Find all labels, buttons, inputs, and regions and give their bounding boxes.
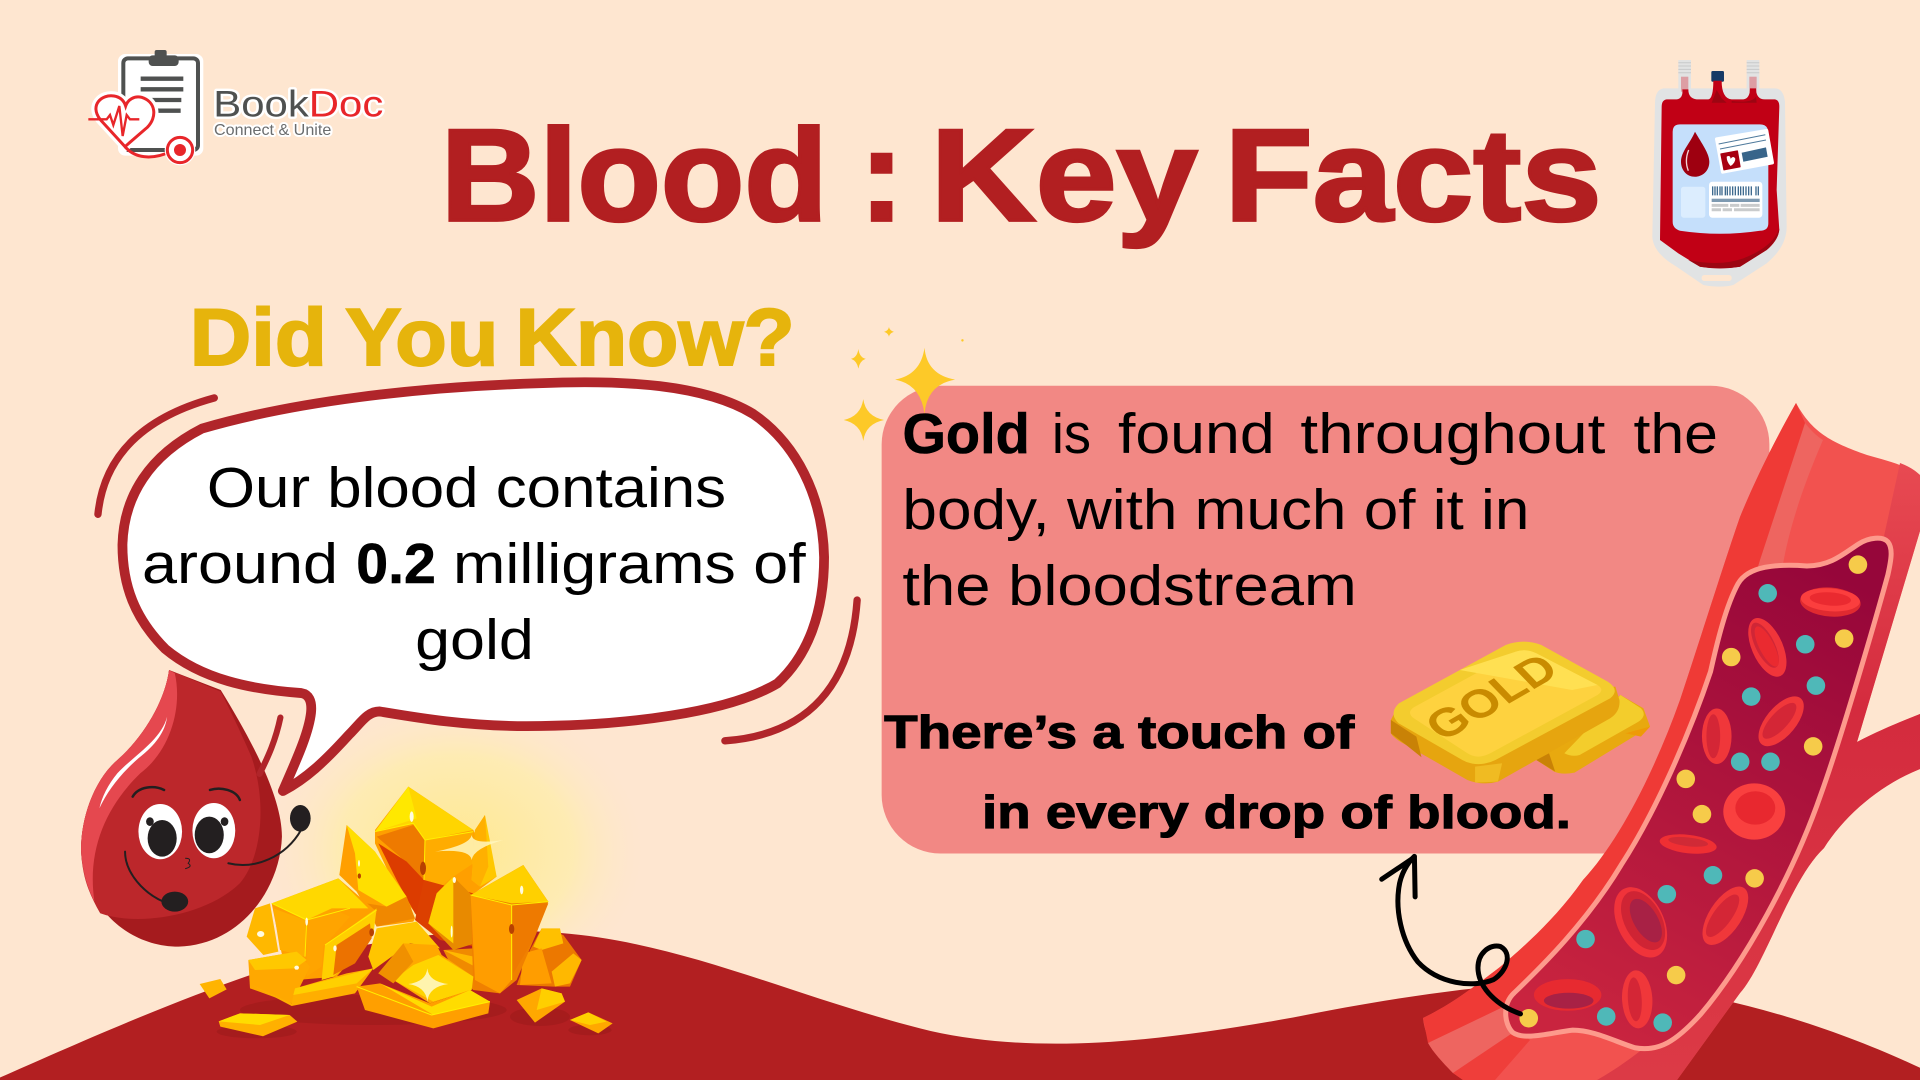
icon: gold bars: [1391, 642, 1650, 783]
character: blood drop: [81, 670, 311, 947]
arrow: vessel to gold text: [1382, 856, 1520, 1014]
text: touch of gold line two: in every drop of blood.: [982, 786, 1571, 838]
small gold nuggets: [200, 979, 613, 1036]
teal cells: [1576, 584, 1825, 1032]
red wave ground: [0, 931, 1920, 1080]
gold glow: [260, 692, 651, 1010]
title: Key: [931, 101, 1198, 248]
center front crystals: [357, 922, 490, 1028]
text: gold is found throughout the body: body, with much of it in: [902, 478, 1529, 541]
icon: blood bag: [1652, 60, 1787, 287]
title: [441, 101, 1602, 248]
text: GOLD stamp: GOLD: [1416, 646, 1568, 749]
wall outer red band: [1423, 403, 1805, 1043]
text: gold in blood fact: [142, 456, 806, 671]
text: gold in blood fact: 0.2: [356, 532, 436, 595]
wall lower red band: [1453, 1030, 1530, 1080]
face lines: [125, 787, 301, 902]
panel background: [882, 386, 1769, 853]
icon: heart with stethoscope: [88, 96, 195, 165]
bubble accent top left: [98, 398, 214, 514]
heading: Did You Know?: [190, 293, 795, 383]
text: gold in blood fact: Our blood contains: [207, 456, 726, 519]
text: gold is found throughout the body: found: [1118, 402, 1275, 465]
bubble outline: [122, 382, 824, 791]
logo tagline: Connect & Unite: [214, 122, 331, 139]
title: Facts: [1224, 101, 1602, 248]
middle crystals: [415, 865, 582, 993]
text: gold in blood fact: around: [142, 532, 338, 595]
yellow platelets: [1519, 555, 1867, 1028]
heading: Did You Know?: Know?: [516, 293, 795, 383]
bubble accent tail: [260, 718, 280, 774]
text: touch of gold line one: There’s a touch of: [884, 706, 1355, 758]
text: gold in blood fact: gold: [415, 608, 534, 671]
vessel lumen: [1506, 538, 1891, 1049]
wall base silhouette: [1423, 403, 1920, 1080]
text: gold in blood fact: milligrams of: [453, 532, 806, 595]
text: gold is found throughout the body: the bloodstream: [902, 554, 1357, 617]
illustration: blood vessel contents: [1382, 538, 1891, 1049]
heading: Did You Know?: You: [345, 293, 498, 383]
icon: sparkles: [844, 327, 964, 441]
logo wordmark: BookDoc: [213, 83, 383, 125]
red blood cells: [1534, 586, 1861, 1030]
ground shadows: [217, 995, 612, 1038]
bubble accent bottom right: [725, 600, 857, 741]
left spire crystal: [339, 825, 415, 927]
left crystals: [247, 878, 377, 1006]
wall lower light band: [1428, 1007, 1517, 1073]
title: :: [860, 101, 904, 248]
text: gold is found throughout the body: is: [1052, 402, 1091, 465]
illustration: gold crystals: [200, 787, 613, 1038]
illustration: blood vessel wall: [1423, 403, 1920, 1080]
eyes: [138, 803, 235, 859]
crystal edge highlights: [272, 823, 548, 1015]
wall right shaded band: [1597, 463, 1920, 1080]
wall upper light band: [1743, 423, 1823, 585]
text: gold is found throughout the body: Gold: [902, 402, 1030, 465]
crystal glints and spots: [257, 811, 523, 1002]
title: Blood: [441, 101, 828, 248]
heading: Did You Know?: Did: [190, 293, 327, 383]
text: gold is found throughout the body: the: [1633, 402, 1718, 465]
callout: speech bubble: [98, 382, 857, 791]
text: gold is found throughout the body: [902, 402, 1718, 617]
panel: gold fact: [882, 386, 1769, 853]
back tall crystal: [375, 787, 497, 927]
text: gold is found throughout the body: throughout: [1300, 402, 1606, 465]
icon: clipboard: [118, 50, 203, 156]
logo: BookDoc: [88, 50, 383, 165]
